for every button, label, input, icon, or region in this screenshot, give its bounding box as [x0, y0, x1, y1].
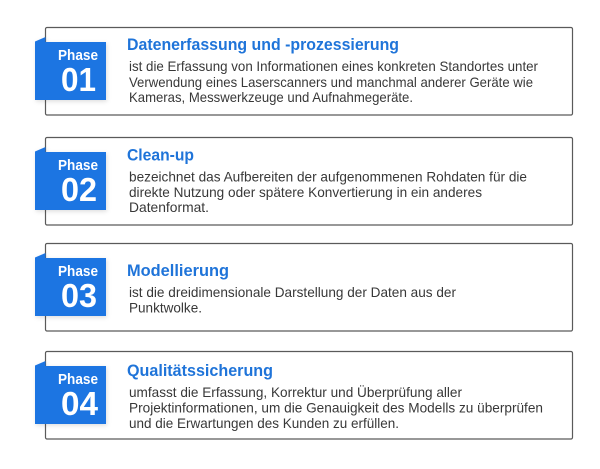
panel: phase 3 [35, 244, 572, 331]
text block: phase 2: Datenformat. [129, 200, 209, 215]
icon: phase 4 badge [35, 361, 106, 424]
text block: phase 4 [129, 385, 543, 431]
panel: phase 1 [35, 28, 572, 115]
icon: phase 1 badge [35, 37, 106, 100]
icon: phase 2 badge [35, 147, 106, 210]
text block: phase 1: Kameras, Messwerkzeuge und Aufnahmegeräte. [129, 90, 413, 105]
heading: phase 4: Qualitätssicherung [127, 361, 273, 380]
text block: phase 2: direkte Nutzung oder spätere Konvertierung in ein anderes [129, 185, 482, 200]
heading: phase 2: Clean-up [127, 146, 194, 164]
text block: phase 4: Projektinformationen, um die Genauigkeit des Modells zu überprüfen [129, 400, 543, 416]
heading: phase 1: Datenerfassung und -prozessierung [127, 35, 399, 54]
text block: phase 4: und die Erwartungen des Kunden zu erfüllen. [129, 416, 399, 431]
text block: phase 2: bezeichnet das Aufbereiten der aufgenommenen Rohdaten für die [129, 170, 527, 184]
text block: phase 1 [129, 59, 538, 105]
icon: phase 3 badge: Phase [58, 263, 98, 280]
text block: phase 2 [129, 170, 527, 215]
text block: phase 1: Verwendung eines Laserscanners und manchmal anderer Geräte wie [129, 75, 533, 90]
icon: phase 3 badge: 03 [61, 277, 97, 314]
text block: phase 3: Punktwolke. [129, 300, 202, 316]
text block: phase 3: ist die dreidimensionale Darstellung der Daten aus der [129, 285, 456, 300]
icon: phase 1 badge: Phase [58, 47, 98, 64]
panel: phase 4 [35, 352, 572, 439]
icon: phase 4 badge: 04 [61, 385, 99, 422]
icon: phase 1 badge: 01 [61, 61, 96, 98]
heading: phase 3: Modellierung [127, 261, 229, 280]
text block: phase 4: umfasst die Erfassung, Korrektur und Überprüfung aller [129, 385, 462, 400]
icon: phase 4 badge: Phase [58, 371, 98, 388]
icon: phase 3 badge [35, 253, 106, 316]
text block: phase 3 [129, 285, 456, 316]
icon: phase 2 badge: 02 [61, 171, 97, 208]
panel: phase 2 [35, 138, 572, 225]
text block: phase 1: ist die Erfassung von Informationen eines konkreten Standortes unter [129, 59, 538, 74]
icon: phase 2 badge: Phase [58, 157, 98, 174]
